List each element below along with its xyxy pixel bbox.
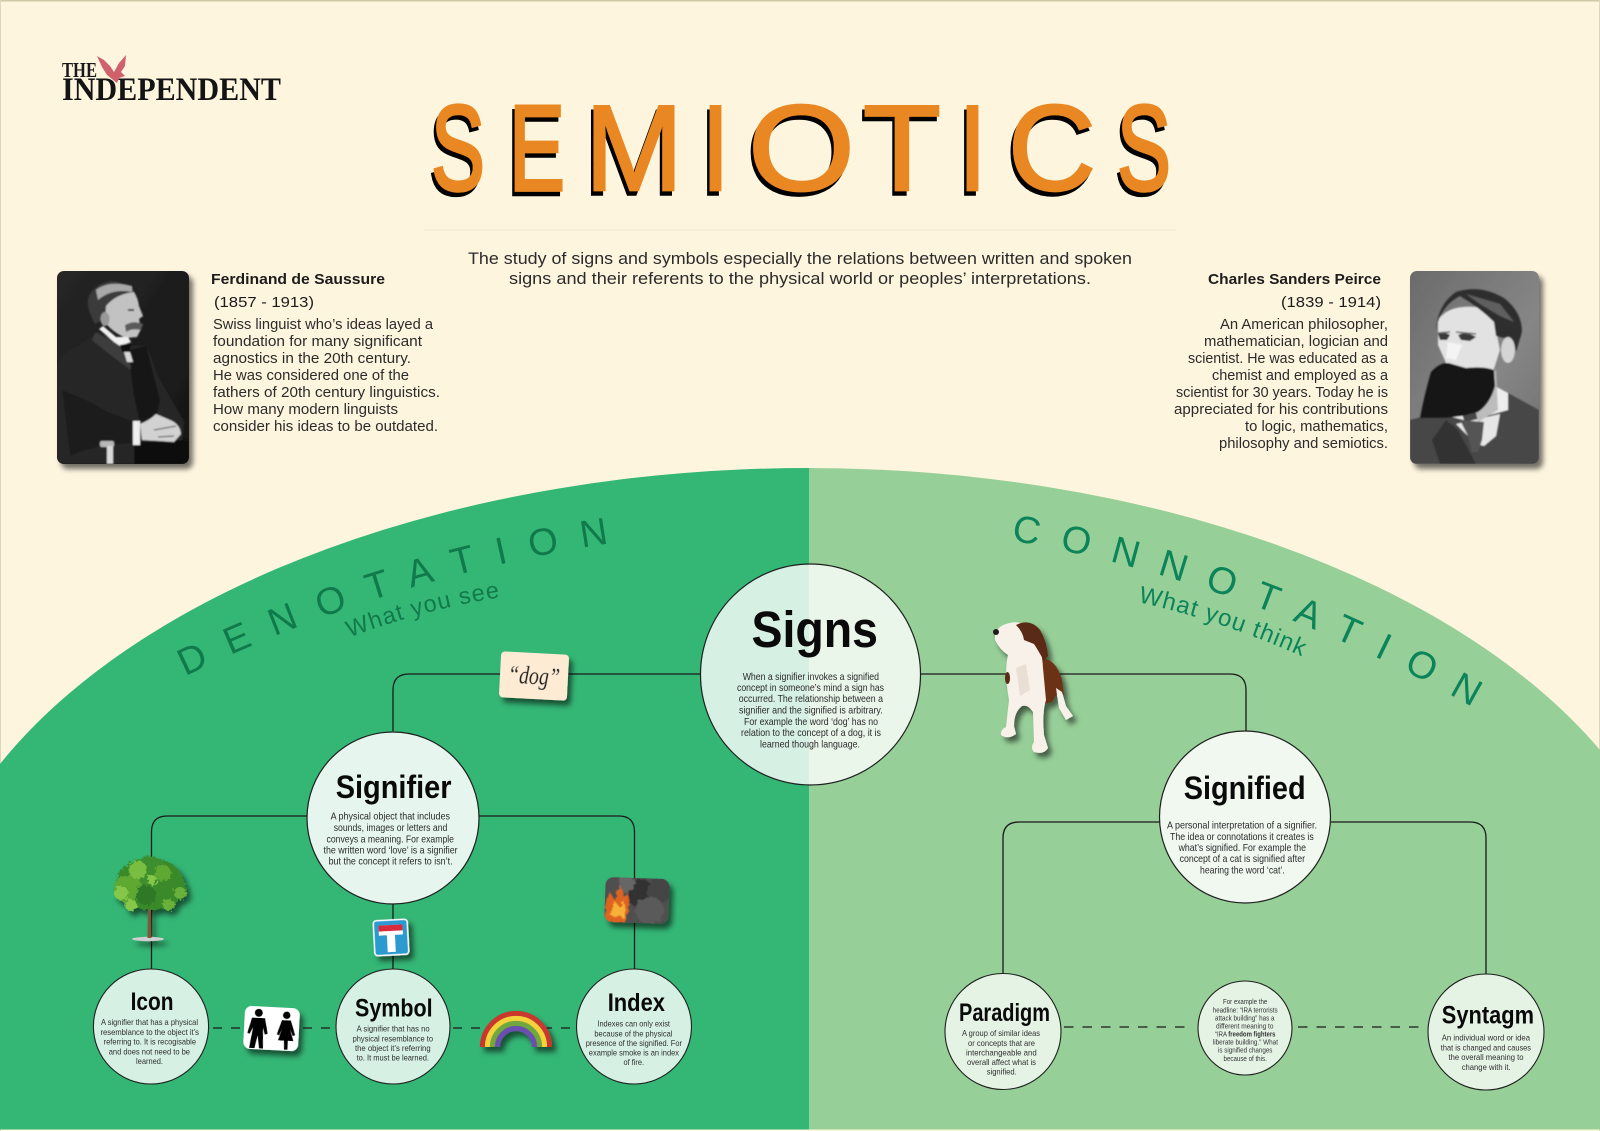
- title: O: [748, 80, 855, 216]
- circle: Symbol: [336, 969, 450, 1084]
- panel: connotation dome half: [809, 468, 1600, 1130]
- circle: Paradigm: Paradigm: [959, 999, 1050, 1027]
- circle: Icon: and does not need to be: [109, 1046, 190, 1056]
- title: T: [863, 80, 941, 216]
- woman figure: [276, 1011, 296, 1050]
- circle: example headline: liberate building.” What: [1213, 1040, 1278, 1046]
- circle: Symbol: physical resemblance to: [353, 1034, 433, 1044]
- title: S: [431, 80, 485, 216]
- Peirce biography: chemist and employed as a: [1212, 368, 1389, 384]
- Peirce biography: scientist for 30 years. Today he is: [1176, 385, 1388, 401]
- circle: example headline: headline: “IRA terrorists: [1213, 1007, 1278, 1014]
- circle: Icon: Icon: [131, 988, 174, 1016]
- circle: Signs: occurred. The relationship between a: [739, 693, 883, 705]
- circle: example headline: For example the: [1223, 999, 1267, 1006]
- circle: Signified: hearing the word ‘cat’.: [1200, 864, 1285, 876]
- subheading: what you see: What you see: [344, 586, 498, 636]
- title: M: [585, 80, 683, 216]
- icon: rainbow: [482, 1014, 550, 1047]
- circle: example headline: attack building” has a: [1215, 1016, 1275, 1022]
- title: I: [958, 80, 987, 216]
- chair post: [100, 441, 114, 447]
- intro text: The study of signs and symbols especially the relations between written and spoken: [468, 250, 1132, 268]
- logo: The Independent: INDEPENDENT: [62, 72, 281, 108]
- circle: example headline: “IRA freedom fighters: [1215, 1031, 1276, 1038]
- tie: [1460, 420, 1484, 452]
- icon: dog illustration: [993, 622, 1073, 753]
- circle: example headline: different meaning to: [1216, 1024, 1274, 1031]
- circle: Index: presence of the signified. For: [586, 1038, 682, 1048]
- circle: Paradigm: signified.: [987, 1067, 1017, 1077]
- title: I: [701, 80, 730, 216]
- collar and tie: [99, 326, 131, 346]
- Saussure biography: consider his ideas to be outdated.: [213, 419, 438, 435]
- circle: Syntagm: [1428, 974, 1544, 1090]
- circle: Symbol: A signifier that has no: [357, 1024, 430, 1034]
- circle: Signifier: but the concept it refers to isn’t.: [329, 856, 453, 868]
- face: [1438, 307, 1500, 375]
- card: "dog" word: [499, 651, 569, 701]
- jacket: [1410, 393, 1539, 464]
- panel: denotation dome half: [0, 468, 809, 1130]
- circle: Signs: relation to the concept of a dog, it is: [741, 727, 881, 739]
- circle: Paradigm: A group of similar ideas: [962, 1028, 1040, 1038]
- beard: [1420, 363, 1495, 418]
- circle: Paradigm: or concepts that are: [968, 1038, 1035, 1048]
- circle: Index: [576, 969, 692, 1084]
- circle: Paradigm: interchangeable and: [966, 1048, 1037, 1058]
- circle: Index: because of the physical: [594, 1028, 672, 1038]
- card: "dog" word: “dog”: [507, 662, 561, 691]
- icon: no-through-road sign: [373, 919, 409, 956]
- circle: Signs: When a signifier invokes a signified: [743, 671, 879, 683]
- logo: The Independent: THE: [62, 58, 97, 82]
- circle: Signifier: conveys a meaning. For example: [326, 833, 454, 845]
- Peirce biography: An American philosopher,: [1220, 317, 1388, 333]
- circle: Signs: For example the word ‘dog’ has no: [744, 716, 878, 728]
- Peirce biography: to logic, mathematics,: [1245, 419, 1388, 435]
- dog body: [995, 622, 1048, 753]
- circle: Index: Index: [608, 989, 665, 1017]
- heading: denotation: DENOTATION: [177, 518, 606, 675]
- circle: example headline: [1198, 981, 1292, 1075]
- circle: Icon: [93, 969, 209, 1084]
- circle: Symbol: to. It must be learned.: [357, 1052, 429, 1062]
- connector lines: denotation tree: [152, 674, 701, 1028]
- circle: Paradigm: overall affect what is: [967, 1057, 1036, 1067]
- ear: [1501, 337, 1515, 363]
- circle: Icon: resemblance to the object it’s: [100, 1027, 199, 1037]
- Saussure biography: He was considered one of the: [213, 368, 409, 384]
- circle: Signs: [700, 564, 920, 785]
- icon: man and woman pictogram: [243, 1006, 300, 1051]
- dog rear and hind leg: [1040, 658, 1064, 704]
- Peirce biography: [1174, 271, 1389, 452]
- Peirce biography: scientist. He was educated as a: [1188, 351, 1389, 367]
- Saussure biography: (1857 - 1913): [214, 294, 314, 311]
- Peirce biography: philosophy and semiotics.: [1219, 436, 1388, 452]
- photo: Ferdinand de Saussure: [56, 271, 189, 464]
- intro text: signs and their referents to the physical world or peoples’ interpretations.: [509, 270, 1091, 288]
- circle: Paradigm: [945, 974, 1061, 1090]
- circle: Index: Indexes can only exist: [597, 1018, 671, 1028]
- circle: Signifier: Signifier: [336, 769, 452, 805]
- Saussure biography: fathers of 20th century linguistics.: [213, 385, 440, 401]
- hands: [140, 414, 181, 442]
- Peirce biography: appreciated for his contributions: [1174, 402, 1388, 418]
- circle: Icon: A signifier that has a physical: [101, 1017, 198, 1027]
- circle: example headline: because of this.: [1224, 1056, 1267, 1063]
- circle: Signified: A personal interpretation of a signifier.: [1167, 820, 1317, 832]
- Saussure biography: [211, 271, 440, 435]
- hair: [88, 281, 136, 324]
- subheading: what you think: What you think: [1142, 586, 1307, 656]
- circle: Signifier: the written word ‘love’ is a signifier: [324, 845, 458, 857]
- circle: Signifier: sounds, images or letters and: [334, 822, 448, 834]
- circle: Syntagm: that is changed and causes: [1441, 1043, 1531, 1053]
- icon: tree: [114, 856, 186, 941]
- circle: Signified: concept of a cat is signified after: [1180, 853, 1305, 865]
- circle: Signs: learned though language.: [760, 738, 860, 750]
- photo: Charles Sanders Peirce: [1410, 271, 1539, 464]
- intro text: [468, 250, 1132, 288]
- dog chest shading: [1016, 664, 1030, 696]
- circle: Icon: learned.: [136, 1056, 163, 1066]
- Peirce biography: Charles Sanders Peirce: [1208, 271, 1381, 288]
- title: E: [509, 80, 565, 216]
- circle: Syntagm: An individual word or idea: [1442, 1033, 1530, 1043]
- Peirce biography: mathematician, logician and: [1204, 334, 1388, 350]
- circle: Signified: Signified: [1184, 770, 1306, 806]
- Saussure biography: foundation for many significant: [213, 334, 422, 350]
- circle: Signified: The idea or connotations it creates is: [1170, 831, 1314, 843]
- icon: fire and smoke photo: [604, 875, 671, 925]
- Saussure biography: agnostics in the 20th century.: [213, 351, 411, 367]
- circle: example headline: is signified changes: [1218, 1048, 1273, 1055]
- connector lines: connotation tree: [921, 674, 1486, 1027]
- circle: Signified: what’s signified. For example the: [1178, 842, 1306, 854]
- circle: Signifier: A physical object that includes: [331, 811, 450, 823]
- hair: [1436, 289, 1522, 352]
- circle: Signifier: [307, 732, 479, 904]
- title: C: [1008, 80, 1096, 216]
- man figure: [246, 1008, 269, 1049]
- circle: Signs: signifier and the signified is arbitrary.: [739, 704, 883, 716]
- icon: red eagle: [97, 55, 126, 83]
- shirt and collar: [1456, 414, 1500, 446]
- circle: Signified: [1160, 731, 1330, 903]
- circle: Index: example smoke is an index: [589, 1048, 680, 1058]
- circle: Index: of fire.: [624, 1057, 644, 1067]
- Saussure biography: Ferdinand de Saussure: [211, 271, 385, 288]
- circle: Signs: concept in someone’s mind a sign has: [737, 682, 884, 694]
- dog ear and head patch: [1016, 622, 1048, 661]
- Saussure biography: How many modern linguists: [213, 402, 398, 418]
- face: [105, 292, 143, 338]
- logo: The Independent: [62, 55, 281, 108]
- heading: connotation: CONNOTATION: [1014, 516, 1482, 706]
- Peirce biography: (1839 - 1914): [1281, 294, 1381, 311]
- circle: Symbol: the object it’s referring: [355, 1043, 431, 1053]
- circle: Syntagm: Syntagm: [1442, 1002, 1534, 1030]
- circle: Symbol: Symbol: [355, 995, 433, 1023]
- title: S: [1117, 80, 1171, 216]
- neck: [1475, 370, 1498, 422]
- circle: Signs: Signs: [752, 601, 878, 658]
- Saussure biography: Swiss linguist who’s ideas layed a: [213, 317, 434, 333]
- circle: Icon: referring to. It is recogisable: [104, 1036, 196, 1046]
- jacket: [56, 332, 189, 464]
- circle: Syntagm: the overall meaning to: [1448, 1052, 1524, 1062]
- circle: Syntagm: change with it.: [1462, 1062, 1511, 1072]
